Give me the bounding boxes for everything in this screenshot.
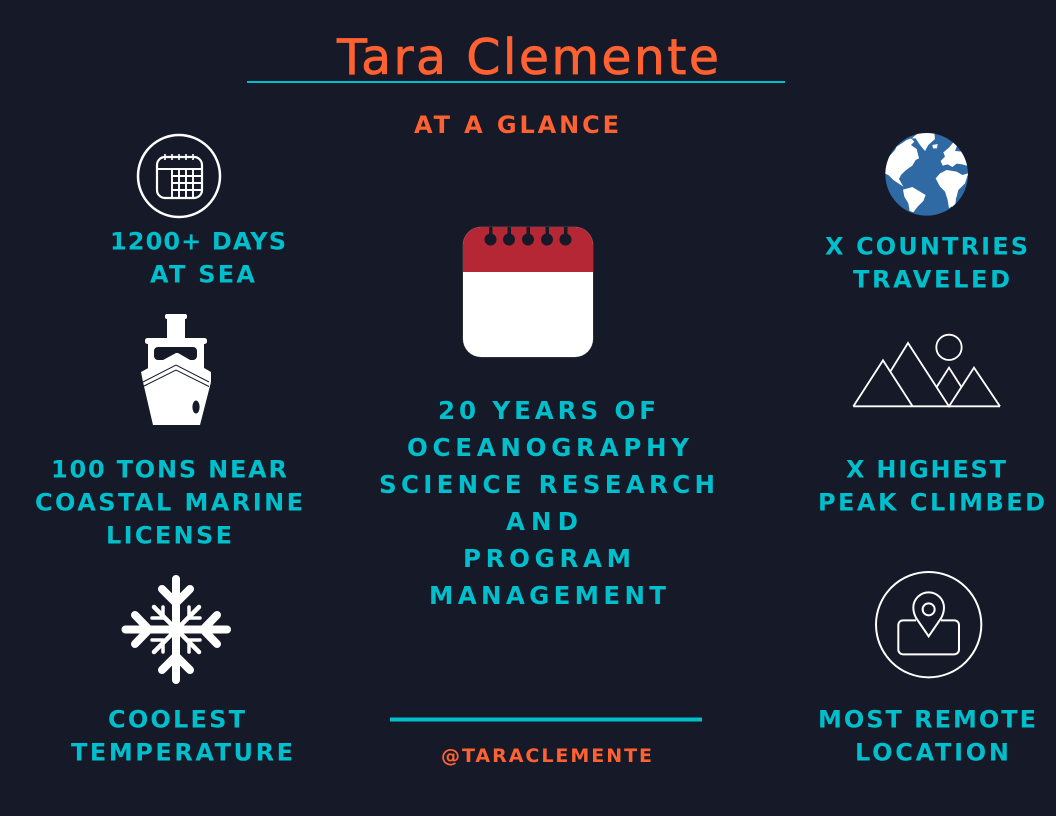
text: years of research	[379, 396, 715, 610]
text: countries traveled	[825, 232, 1028, 294]
text: marine license: LICENSE	[106, 522, 232, 550]
icon: snowflake	[126, 579, 227, 680]
text: days at sea	[110, 228, 286, 288]
text: years of research: PROGRAM	[463, 544, 631, 573]
text: years of research: MANAGEMENT	[429, 581, 666, 610]
title: Tara Clemente	[336, 29, 719, 86]
icon: globe	[884, 133, 970, 216]
text: coolest temperature	[71, 706, 293, 766]
text: coolest temperature: TEMPERATURE	[71, 738, 293, 766]
text: years of research: AND	[506, 507, 578, 536]
divider line	[390, 718, 702, 722]
text: days at sea: AT SEA	[150, 260, 255, 288]
text: years of research: OCEANOGRAPHY	[407, 433, 689, 462]
text: most remote location	[818, 706, 1036, 766]
subtitle: AT A GLANCE	[414, 111, 619, 139]
text: years of research: 20 YEARS OF	[438, 396, 656, 425]
text: countries traveled: TRAVELED	[853, 266, 1010, 294]
handle: @TARACLEMENTE	[441, 745, 652, 767]
text: years of research: SCIENCE RESEARCH	[379, 470, 715, 499]
icon: location pin in circle	[876, 572, 981, 677]
text: most remote location: LOCATION	[855, 738, 1009, 766]
text: marine license	[35, 456, 303, 550]
text: highest peak	[818, 456, 1045, 516]
text: marine license: 100 TONS NEAR	[51, 456, 287, 484]
text: coolest temperature: COOLEST	[108, 706, 246, 734]
icon: large calendar	[462, 226, 594, 358]
icon: ship	[141, 314, 211, 425]
text: marine license: COASTAL MARINE	[35, 488, 303, 516]
icon: mountains	[853, 335, 1000, 406]
text: highest peak: X HIGHEST	[846, 456, 1007, 484]
text: days at sea: 1200+ DAYS	[110, 228, 286, 256]
text: countries traveled: X COUNTRIES	[825, 232, 1028, 260]
text: most remote location: MOST REMOTE	[818, 706, 1036, 734]
text: highest peak: PEAK CLIMBED	[818, 488, 1045, 516]
icon: calendar in circle	[138, 135, 220, 217]
